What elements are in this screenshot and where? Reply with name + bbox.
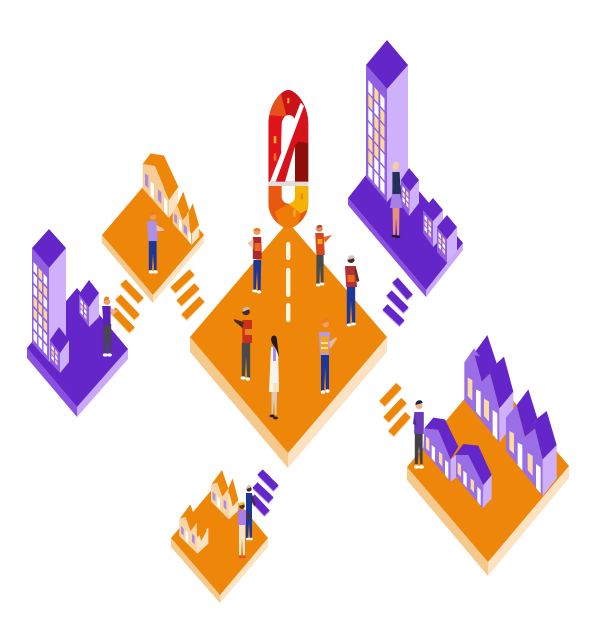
person: man in purple shirt, lower-right platform <box>413 400 424 469</box>
person: older man, grey trousers, left of centre <box>234 307 252 381</box>
panel: left purple platform with tower <box>27 229 128 417</box>
icon: houses, bottom <box>179 470 238 554</box>
icon: small block B, right <box>423 198 443 247</box>
icon: houses, lower-right <box>423 335 557 508</box>
person: woman in lilac top, bottom platform <box>238 502 251 558</box>
person: man in purple shirt, left platform <box>102 297 118 357</box>
person: doctor in white coat, centre <box>269 336 279 419</box>
person: man in lilac shirt, upper-left platform <box>147 212 164 274</box>
icon: tall tower, right <box>366 40 408 202</box>
panel: lower-right orange platform with houses <box>407 335 569 576</box>
arrow: orange stripes, upper-left to centre <box>173 272 202 318</box>
person: man, blue trousers, bottom platform <box>246 485 256 540</box>
icon: red and orange ring logo <box>267 88 310 230</box>
icon: small block, left front <box>50 327 69 373</box>
arrow: orange stripes, left to upper-left <box>113 282 141 332</box>
road markings <box>286 242 290 322</box>
panel: upper-left orange platform with houses <box>102 153 204 303</box>
illustration: community network <box>27 40 569 603</box>
panel: bottom orange platform with houses <box>171 470 268 603</box>
panel: upper-right purple platform with tower <box>348 40 463 297</box>
arrow: purple stripes, bottom <box>252 472 276 514</box>
arrow: orange stripes, lower-right <box>382 386 408 435</box>
icon: small block A, right <box>401 168 419 216</box>
arrow: purple stripes, upper-right <box>385 280 410 324</box>
icon: houses, upper-left <box>143 153 199 245</box>
icon: small block C, right <box>437 215 457 263</box>
person: worker in high-vis vest, lower right of centre <box>319 318 337 394</box>
icon: small block, left rear <box>79 280 99 327</box>
person: woman in blazer, upper-right platform <box>390 162 402 238</box>
panel: central orange platform <box>190 222 387 468</box>
person: man, patterned shirt, top right of centre <box>315 225 332 286</box>
person: older man, blue trousers, right of centre <box>345 255 359 326</box>
icon: tall tower, left <box>32 229 66 362</box>
person: man, blue trousers, top left of centre <box>247 228 262 294</box>
